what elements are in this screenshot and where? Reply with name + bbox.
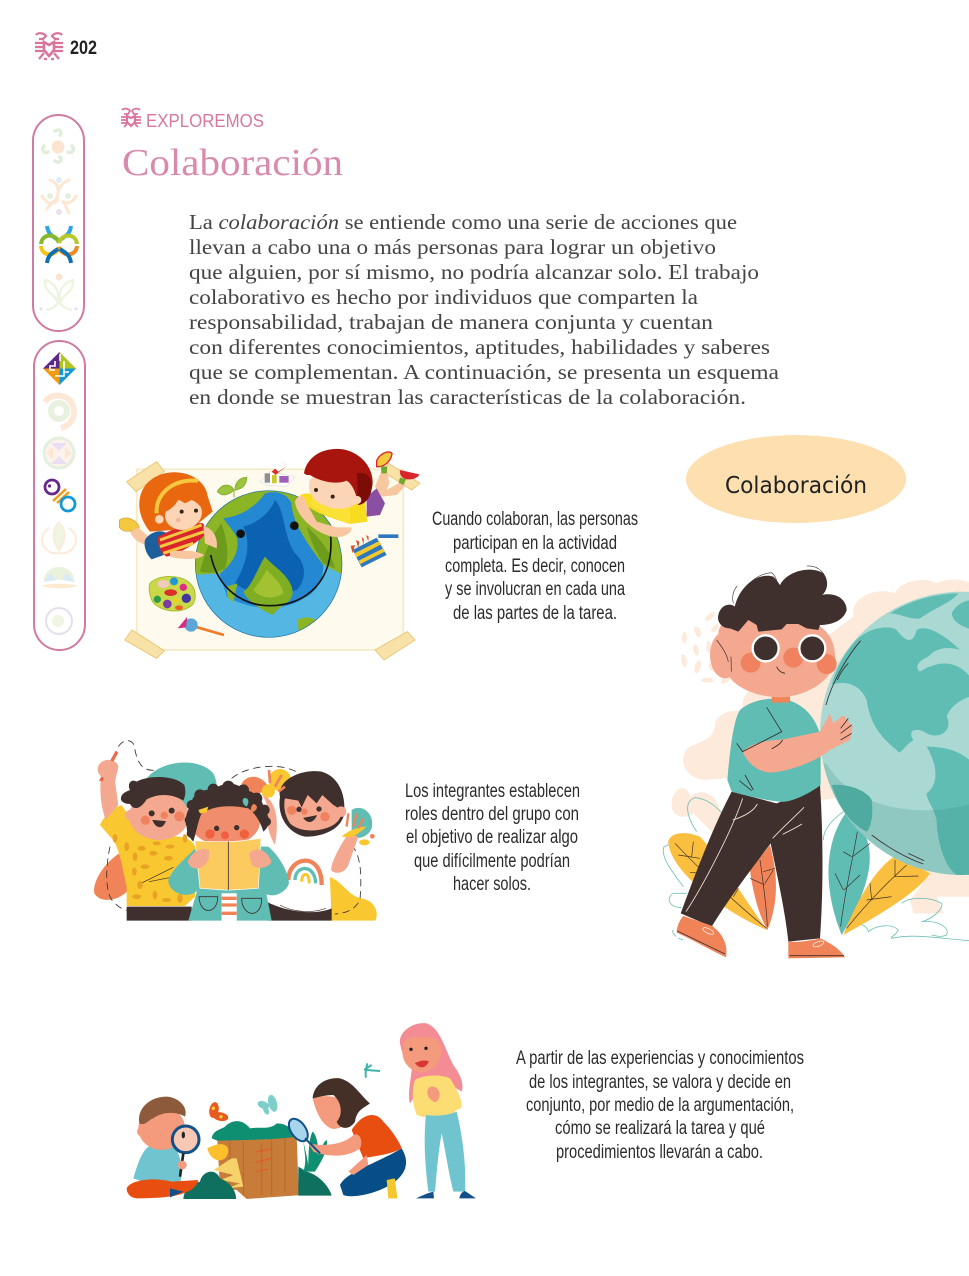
paint brush [178,617,224,635]
caption: roles: Los integrantes establecen [405,781,580,802]
icon: page ornament [35,33,63,59]
girl right [255,770,367,921]
illustration: three children with a book [94,741,377,921]
heading bubble: Colaboración: Colaboración [725,473,867,499]
paint tubes [260,462,295,487]
caption: roles: hacer solos. [453,874,531,895]
caption: argumentation: cómo se realizará la tarea y qué [555,1118,765,1139]
tree stump [212,1121,302,1199]
shoes [677,916,845,958]
crayons box [351,534,398,567]
caption: participation [432,509,638,624]
open book [195,838,261,890]
icon: faded branches [42,177,76,215]
globe [817,590,969,877]
panel: sidebar top [33,115,84,331]
icon: faded leaves [40,274,78,310]
page number header [35,33,97,59]
yellow flower and leaves [207,1144,243,1188]
title: Colaboración [122,142,343,184]
caption: participation: participan en la actividad [453,533,617,554]
boy left [98,751,195,921]
caption: roles: el objetivo de realizar algo [406,827,578,848]
intro text block: con diferentes conocimientos, aptitudes, habilidades y saberes [189,335,770,359]
leaves [668,812,930,935]
head [710,566,847,703]
dashed lines [107,741,361,914]
globe [193,487,343,640]
icon: coloured diamond [43,352,76,385]
intro text block: en donde se muestran las características de la colaboración. [189,385,746,409]
icon: faded circle [46,608,72,634]
caption: participation: Cuando colaboran, las personas [432,509,638,530]
illustration: boy holding the Earth [663,566,969,958]
girl with magnifier [285,1078,406,1198]
intro text block: La colaboración se entiende como una serie de acciones que [189,210,737,234]
icon: faded cross circle [44,438,74,468]
icon: faded shell [42,567,77,588]
heading bubble: Colaboración [686,435,906,523]
icon: coloured collaboration symbol [41,226,77,263]
intro text block: colaborativo es hecho por individuos que comparten la [189,285,698,309]
illustration: children painting a globe [119,449,420,660]
shirt [727,699,821,802]
curly child with book [168,781,289,921]
intro text block: que se complementan. A continuación, se presenta un esquema [189,360,779,384]
cheeks [741,648,837,674]
sprout [217,477,247,497]
caption: roles: que difícilmente podrían [414,851,570,872]
boy [295,449,419,537]
panel: sidebar bottom [34,341,85,650]
glasses [753,635,825,661]
boy with magnifier [127,1097,199,1198]
page number: 202 [70,38,97,59]
paint palette [149,576,195,611]
pants [681,785,822,942]
icon: faded lotus [42,522,76,553]
smile [211,537,331,606]
caption: argumentation: de los integrantes, se valora y decide en [529,1072,791,1093]
caption: roles [405,781,580,895]
butterflies [208,1063,380,1122]
background shapes [94,763,377,921]
icon: section ornament [121,109,141,127]
caption: participation: completa. Es decir, conocen [445,556,625,577]
cream background blobs [672,579,969,913]
intro text block: que alguien, por sí mismo, no podría alcanzar solo. El trabajo [189,260,759,284]
caption: roles: roles dentro del grupo con [405,804,579,825]
plant outlines [663,798,969,941]
eyes [236,521,299,538]
section name: EXPLOREMOS [146,111,264,131]
caption: argumentation: conjunto, por medio de la argumentación, [526,1095,794,1116]
intro text block: llevan a cabo una o más personas para lograr un objetivo [189,235,716,259]
icon: faded ring [45,396,74,428]
section label [121,109,264,131]
girl [119,472,217,559]
paper [137,469,403,650]
tapes [125,462,420,660]
caption: argumentation: A partir de las experiencias y conocimientos [516,1048,804,1069]
bushes [183,1132,332,1199]
intro text block [189,210,779,409]
caption: argumentation: procedimientos llevarán a cabo. [556,1142,763,1163]
caption: argumentation [516,1048,804,1163]
caption: participation: de las partes de la tarea. [453,603,617,624]
caption: participation: y se involucran en cada una [445,579,625,600]
icon: purple and blue rings [45,480,75,511]
intro text block: responsabilidad, trabajan de manera conjunta y cuentan [189,310,713,334]
arm [737,707,853,791]
girl standing [400,1023,476,1198]
icon: faded curls [43,130,73,162]
illustration: children exploring a tree stump [127,1023,476,1199]
hair [718,570,847,632]
